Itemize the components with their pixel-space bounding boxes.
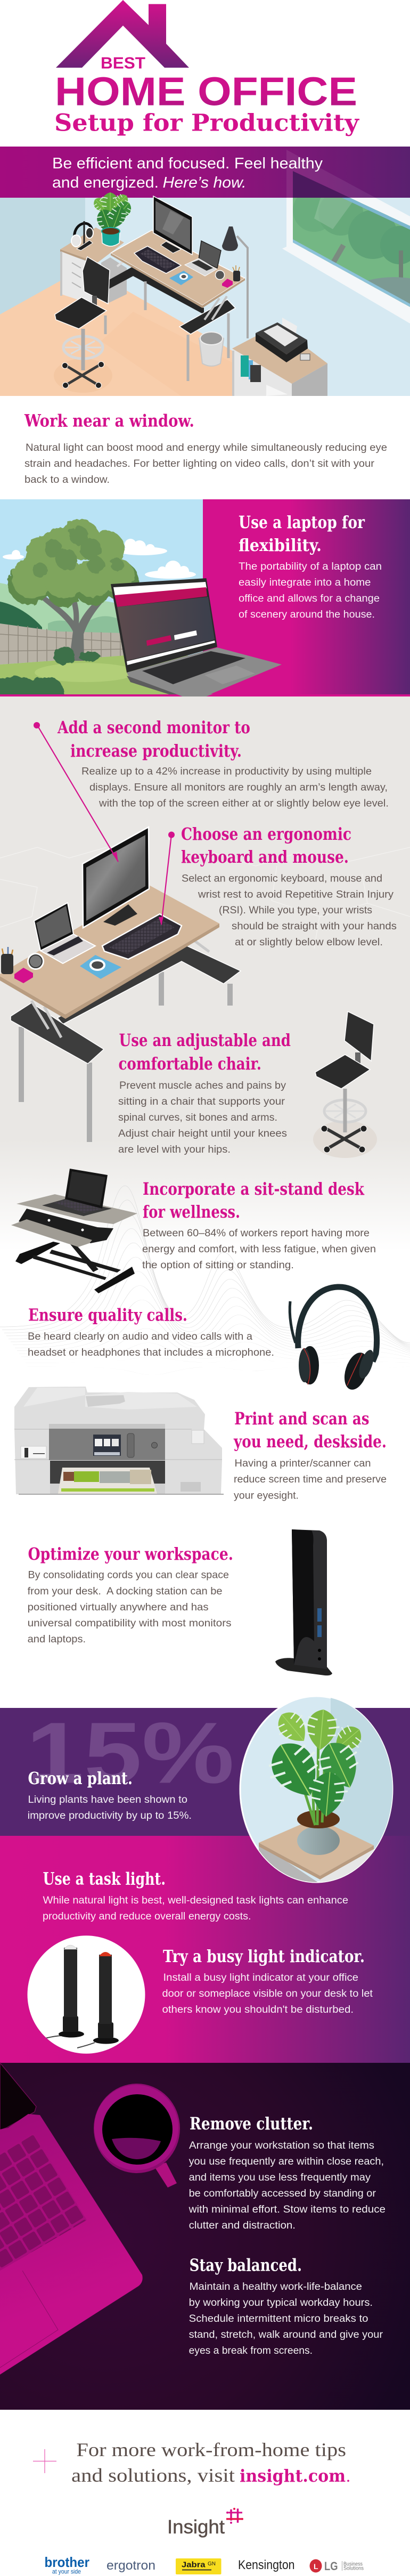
tree bbox=[8, 519, 139, 661]
body text: Having a printer/scanner can bbox=[234, 1458, 371, 1469]
logo: brother: brother bbox=[45, 2554, 89, 2570]
card slots bbox=[21, 1446, 46, 1459]
window seen through banner bbox=[286, 150, 375, 198]
panel: dark clutter section bbox=[0, 2063, 410, 2410]
printed paper bbox=[58, 1468, 157, 1494]
monitor bbox=[153, 196, 192, 255]
body text: are level with your hips. bbox=[118, 1144, 231, 1155]
body text bbox=[28, 1794, 192, 1821]
heading: Choose an ergonomic bbox=[181, 824, 351, 844]
body text: remove clutter: and items you use less frequently may bbox=[189, 2172, 371, 2183]
body text: strain and headaches. For better lighting on video calls, don’t sit with your bbox=[24, 458, 375, 469]
logo: jabra bbox=[176, 2558, 222, 2574]
drawers bbox=[61, 252, 96, 305]
main desk top bbox=[111, 230, 245, 305]
body text: stay balanced bbox=[189, 2281, 383, 2356]
body text: back to a window. bbox=[24, 474, 110, 485]
tip: add a second monitor bbox=[57, 717, 389, 809]
headset photo bbox=[290, 1287, 377, 1392]
tip: sit-stand desk bbox=[11, 1169, 376, 1293]
body text: stay balanced: eyes a break from screens. bbox=[189, 2345, 313, 2356]
body text: remove clutter bbox=[188, 2140, 386, 2231]
heading: Ensure quality calls. bbox=[28, 1305, 187, 1325]
soil bbox=[297, 1810, 340, 1828]
chair bbox=[54, 257, 112, 393]
speaker bbox=[27, 953, 44, 970]
body text: task light: While natural light is best, well-designed task lights can enhance bbox=[43, 1895, 348, 1906]
body text: remove clutter: with minimal effort. Stow items to reduce bbox=[188, 2204, 386, 2215]
tip: optimize workspace bbox=[28, 1529, 332, 1675]
hero backdrop: room and window bbox=[0, 198, 410, 396]
panel buttons bbox=[127, 1433, 134, 1457]
body text: positioned virtually anywhere and has bbox=[28, 1602, 209, 1613]
heading: flexibility. bbox=[239, 535, 322, 555]
body text: remove clutter: you use frequently are within close reach, bbox=[189, 2156, 384, 2167]
chair illustration bbox=[313, 1011, 377, 1158]
shrubs bbox=[0, 647, 101, 694]
desk frame bbox=[109, 266, 204, 314]
desk base left foot bbox=[11, 1003, 104, 1064]
body text: stay balanced: Schedule intermittent micro breaks to bbox=[189, 2313, 368, 2324]
desk foot bbox=[179, 299, 235, 334]
logo: insight bbox=[167, 2508, 243, 2538]
panel: task light and busy light bbox=[0, 1836, 410, 2063]
busy light photo bbox=[28, 1935, 145, 2054]
tip: ergonomic keyboard bbox=[181, 824, 397, 948]
body text bbox=[28, 1570, 232, 1645]
partner logos bbox=[45, 2554, 364, 2575]
magenta gradient panel bbox=[203, 499, 410, 694]
body text: from your desk. A docking station can be bbox=[28, 1586, 223, 1597]
heading: stay balanced: Stay balanced. bbox=[190, 2255, 302, 2275]
body text: task light: productivity and reduce overall energy costs. bbox=[43, 1911, 251, 1922]
trackpad bbox=[0, 2271, 58, 2368]
tip: print and scan bbox=[14, 1387, 387, 1502]
mouse pad and mouse bbox=[80, 955, 121, 979]
icon: house roof bbox=[56, 0, 189, 68]
body text: Adjust chair height until your knees bbox=[118, 1128, 287, 1139]
laptop bbox=[185, 241, 221, 276]
heading bbox=[239, 512, 365, 555]
tip: adjustable chair bbox=[118, 1011, 377, 1158]
plant illustration in oval bbox=[240, 1695, 395, 1886]
side desk bbox=[60, 228, 124, 265]
trash can bbox=[199, 332, 224, 366]
back wall bbox=[0, 147, 410, 396]
heading: Use an adjustable and bbox=[119, 1030, 291, 1050]
hedge bbox=[0, 602, 42, 629]
logo: lg: Solutions bbox=[343, 2566, 364, 2572]
icon: plus bbox=[33, 2449, 56, 2473]
body text: headset or headphones that includes a microphone. bbox=[28, 1347, 274, 1358]
heading: Grow a plant. bbox=[28, 1768, 133, 1788]
body text: your eyesight. bbox=[234, 1490, 299, 1502]
panel: laptop flexibility bbox=[0, 499, 410, 704]
monitor bbox=[83, 827, 149, 928]
body text: improve productivity by up to 15%. bbox=[28, 1810, 192, 1821]
body text: busy light: door or someplace visible on your desk to let bbox=[162, 1988, 373, 1999]
heading: remove clutter: Remove clutter. bbox=[190, 2113, 313, 2134]
body text: stay balanced: Maintain a healthy work-life-balance bbox=[190, 2281, 362, 2293]
body text bbox=[182, 873, 397, 948]
callout line to keyboard bbox=[159, 831, 175, 925]
backyard scene bbox=[0, 499, 203, 704]
body text: remove clutter: Arrange your workstation so that items bbox=[189, 2140, 374, 2151]
heading: comfortable chair. bbox=[118, 1054, 261, 1074]
tagline line two: and energized. bbox=[52, 174, 159, 191]
leaves bbox=[259, 1705, 369, 1818]
heading: keyboard and mouse. bbox=[181, 847, 349, 867]
lamp bbox=[222, 226, 248, 338]
printer photo bbox=[14, 1387, 224, 1495]
tagline line one: Be efficient and focused. Feel healthy bbox=[52, 155, 323, 172]
heading bbox=[57, 717, 250, 761]
laptop body bbox=[0, 2114, 143, 2375]
logo: jabra: GN bbox=[208, 2561, 216, 2567]
logo: lg: Business bbox=[343, 2562, 363, 2567]
heading: Optimize your workspace. bbox=[28, 1544, 233, 1564]
body text: Realize up to a 42% increase in productivity by using multiple bbox=[81, 766, 372, 777]
sticker bbox=[181, 1482, 201, 1492]
desk struts bbox=[31, 941, 209, 1038]
heading: Incorporate a sit-stand desk bbox=[143, 1179, 365, 1199]
background network lines bbox=[0, 847, 410, 949]
body text: universal compatibility with most monitors bbox=[28, 1618, 232, 1629]
table sides bbox=[259, 1846, 374, 1882]
window frame bbox=[282, 150, 410, 323]
printer body bbox=[14, 1387, 222, 1494]
body text: displays. Ensure all monitors are roughly an arm’s length away, bbox=[89, 782, 388, 793]
docking station photo bbox=[275, 1529, 332, 1675]
table top bbox=[259, 1825, 374, 1876]
printer cabinet bbox=[232, 325, 327, 396]
heading: busy light: Try a busy light indicator. bbox=[163, 1946, 365, 1966]
headphones stand bbox=[71, 221, 93, 250]
body text: reduce screen time and preserve bbox=[234, 1474, 387, 1485]
body text: busy light: Install a busy light indicator at your office bbox=[163, 1972, 358, 1983]
title: home office: HOME OFFICE bbox=[55, 69, 357, 114]
heading bbox=[118, 1030, 291, 1074]
magenta box bbox=[14, 968, 33, 983]
magenta rule bbox=[0, 694, 410, 696]
pot bbox=[297, 1826, 340, 1855]
body text: (RSI). While you type, your wrists bbox=[219, 905, 372, 916]
body text bbox=[239, 561, 382, 620]
title block bbox=[54, 0, 359, 136]
fence bbox=[0, 623, 125, 665]
tree crown bbox=[8, 519, 139, 607]
body text: easily integrate into a home bbox=[239, 577, 371, 588]
desk struts bbox=[204, 296, 227, 320]
body text: remove clutter: clutter and distraction. bbox=[189, 2220, 296, 2231]
callout line to monitor bbox=[34, 722, 118, 862]
logo: insight: Insight bbox=[167, 2516, 225, 2538]
logo: jabra: Jabra bbox=[182, 2560, 206, 2570]
logo: ergotron: ergotron bbox=[106, 2558, 155, 2573]
body text: of scenery around the house. bbox=[239, 609, 375, 620]
title word: best: BEST bbox=[101, 54, 145, 72]
pen cup bbox=[1, 947, 13, 974]
panel: grey background bbox=[0, 696, 410, 1251]
floor shade bbox=[101, 312, 232, 396]
link: insight.com: insight.com bbox=[240, 2466, 346, 2486]
tagline italic: Here’s how. bbox=[163, 174, 246, 191]
keyboard bbox=[134, 246, 181, 273]
desk legs bbox=[21, 972, 230, 1142]
printer bbox=[256, 318, 310, 362]
lawn bbox=[0, 655, 203, 694]
body text: at or slightly below elbow level. bbox=[235, 937, 383, 948]
body text bbox=[24, 442, 387, 485]
body text: Between 60–84% of workers report having more bbox=[143, 1228, 370, 1239]
body text: sitting in a chair that supports your bbox=[118, 1096, 285, 1107]
body text: Prevent muscle aches and pains by bbox=[119, 1080, 286, 1091]
body text: energy and comfort, with less fatigue, when given bbox=[142, 1244, 376, 1255]
tip: work near a window bbox=[24, 410, 387, 485]
laptop keyboard bbox=[0, 2133, 87, 2271]
control panel bbox=[49, 1429, 165, 1460]
logo: lg: LG bbox=[324, 2559, 338, 2573]
side step bbox=[192, 1430, 204, 1444]
heading: Add a second monitor to bbox=[57, 717, 250, 738]
logo: brother: at your side bbox=[52, 2567, 81, 2575]
touch screen bbox=[93, 1435, 121, 1456]
groove bbox=[49, 1424, 165, 1429]
body text: Natural light can boost mood and energy while simultaneously reducing eye bbox=[26, 442, 387, 453]
left wall bbox=[0, 147, 85, 396]
heading: for wellness. bbox=[143, 1202, 240, 1222]
body text: The portability of a laptop can bbox=[239, 561, 382, 572]
desk top bbox=[0, 885, 219, 1019]
body text bbox=[234, 1458, 387, 1502]
body text: stay balanced: by working your typical workday hours. bbox=[189, 2297, 373, 2308]
heading: Work near a window. bbox=[24, 410, 194, 431]
laptop photo bbox=[111, 578, 282, 702]
panel: grow a plant bbox=[0, 1704, 410, 1836]
logo: lg: L bbox=[314, 2562, 318, 2571]
tip: quality calls bbox=[28, 1287, 377, 1392]
body text: office and allows for a change bbox=[239, 593, 380, 604]
heading: task light: Use a task light. bbox=[43, 1869, 166, 1889]
banner: tagline bbox=[0, 147, 410, 198]
body text: stay balanced: stand, stretch, walk around and give your bbox=[189, 2329, 383, 2340]
computer tower bbox=[101, 257, 127, 303]
logo: kensington: Kensington bbox=[238, 2558, 295, 2572]
subtitle: setup for productivity: Setup for Productivity bbox=[54, 110, 359, 136]
far trees bbox=[0, 583, 128, 661]
desk illustration bbox=[0, 722, 241, 1142]
heading: Print and scan as bbox=[234, 1408, 370, 1429]
keyboard bbox=[102, 914, 182, 959]
laptop screen bbox=[0, 2063, 36, 2130]
window view bbox=[293, 198, 410, 307]
body text: task light bbox=[43, 1895, 348, 1922]
body text: By consolidating cords you can clear space bbox=[28, 1570, 229, 1581]
period: . bbox=[346, 2466, 350, 2485]
body text: remove clutter: be comfortably accessed by standing or bbox=[189, 2188, 376, 2199]
footer: call to action bbox=[33, 2439, 350, 2486]
body text: busy light bbox=[162, 1972, 373, 2015]
clouds bbox=[3, 539, 196, 579]
body text: the option of sitting or standing. bbox=[142, 1260, 294, 1271]
desk legs bbox=[105, 281, 228, 381]
laptop bottom overlap bbox=[176, 694, 213, 701]
body text bbox=[118, 1080, 287, 1155]
pen cup bbox=[233, 265, 240, 281]
body text: Select an ergonomic keyboard, mouse and bbox=[182, 873, 382, 885]
plant bbox=[90, 191, 136, 246]
heading bbox=[181, 824, 351, 867]
sit-stand desk photo bbox=[11, 1169, 137, 1293]
cta line one: For more work-from-home tips bbox=[76, 2439, 346, 2460]
heading bbox=[233, 1408, 387, 1452]
body text: with the top of the screen either at or slightly below eye level. bbox=[99, 798, 389, 809]
body text: should be straight with your hands bbox=[232, 921, 397, 932]
body text: spinal curves, sit bones and arms. bbox=[118, 1112, 277, 1123]
floor bbox=[0, 267, 232, 396]
mouse and pad bbox=[169, 271, 193, 285]
desk base right bbox=[58, 946, 241, 1024]
body text: Living plants have been shown to bbox=[28, 1794, 187, 1805]
body text: and laptops. bbox=[28, 1634, 86, 1645]
body text: busy light: others know you shouldn't be disturbed. bbox=[162, 2004, 354, 2015]
logo: lg bbox=[310, 2559, 364, 2573]
body text: wrist rest to avoid Repetitive Strain Injury bbox=[198, 889, 394, 900]
laptop bbox=[34, 903, 95, 963]
cta line two: and solutions, visit bbox=[71, 2465, 235, 2486]
heading: Use a laptop for bbox=[239, 512, 365, 532]
heading bbox=[143, 1179, 365, 1222]
hero illustration: isometric home office bbox=[54, 191, 327, 396]
scanner lid bbox=[23, 1388, 197, 1409]
body text: Be heard clearly on audio and video calls with a bbox=[28, 1331, 252, 1342]
icon: insight mark bbox=[226, 2508, 243, 2524]
body text bbox=[142, 1228, 376, 1271]
big stat: 15%: 15% bbox=[26, 1704, 234, 1801]
coffee cup bbox=[94, 2084, 180, 2188]
back wall shade bbox=[331, 1695, 395, 1849]
body text bbox=[81, 766, 389, 809]
paper tray bbox=[50, 1461, 165, 1484]
heading: increase productivity. bbox=[70, 741, 242, 761]
wave mesh background bbox=[0, 1186, 410, 1375]
speaker bbox=[215, 271, 225, 279]
stems bbox=[301, 1732, 325, 1825]
magenta box bbox=[222, 279, 233, 288]
body text bbox=[28, 1331, 274, 1358]
